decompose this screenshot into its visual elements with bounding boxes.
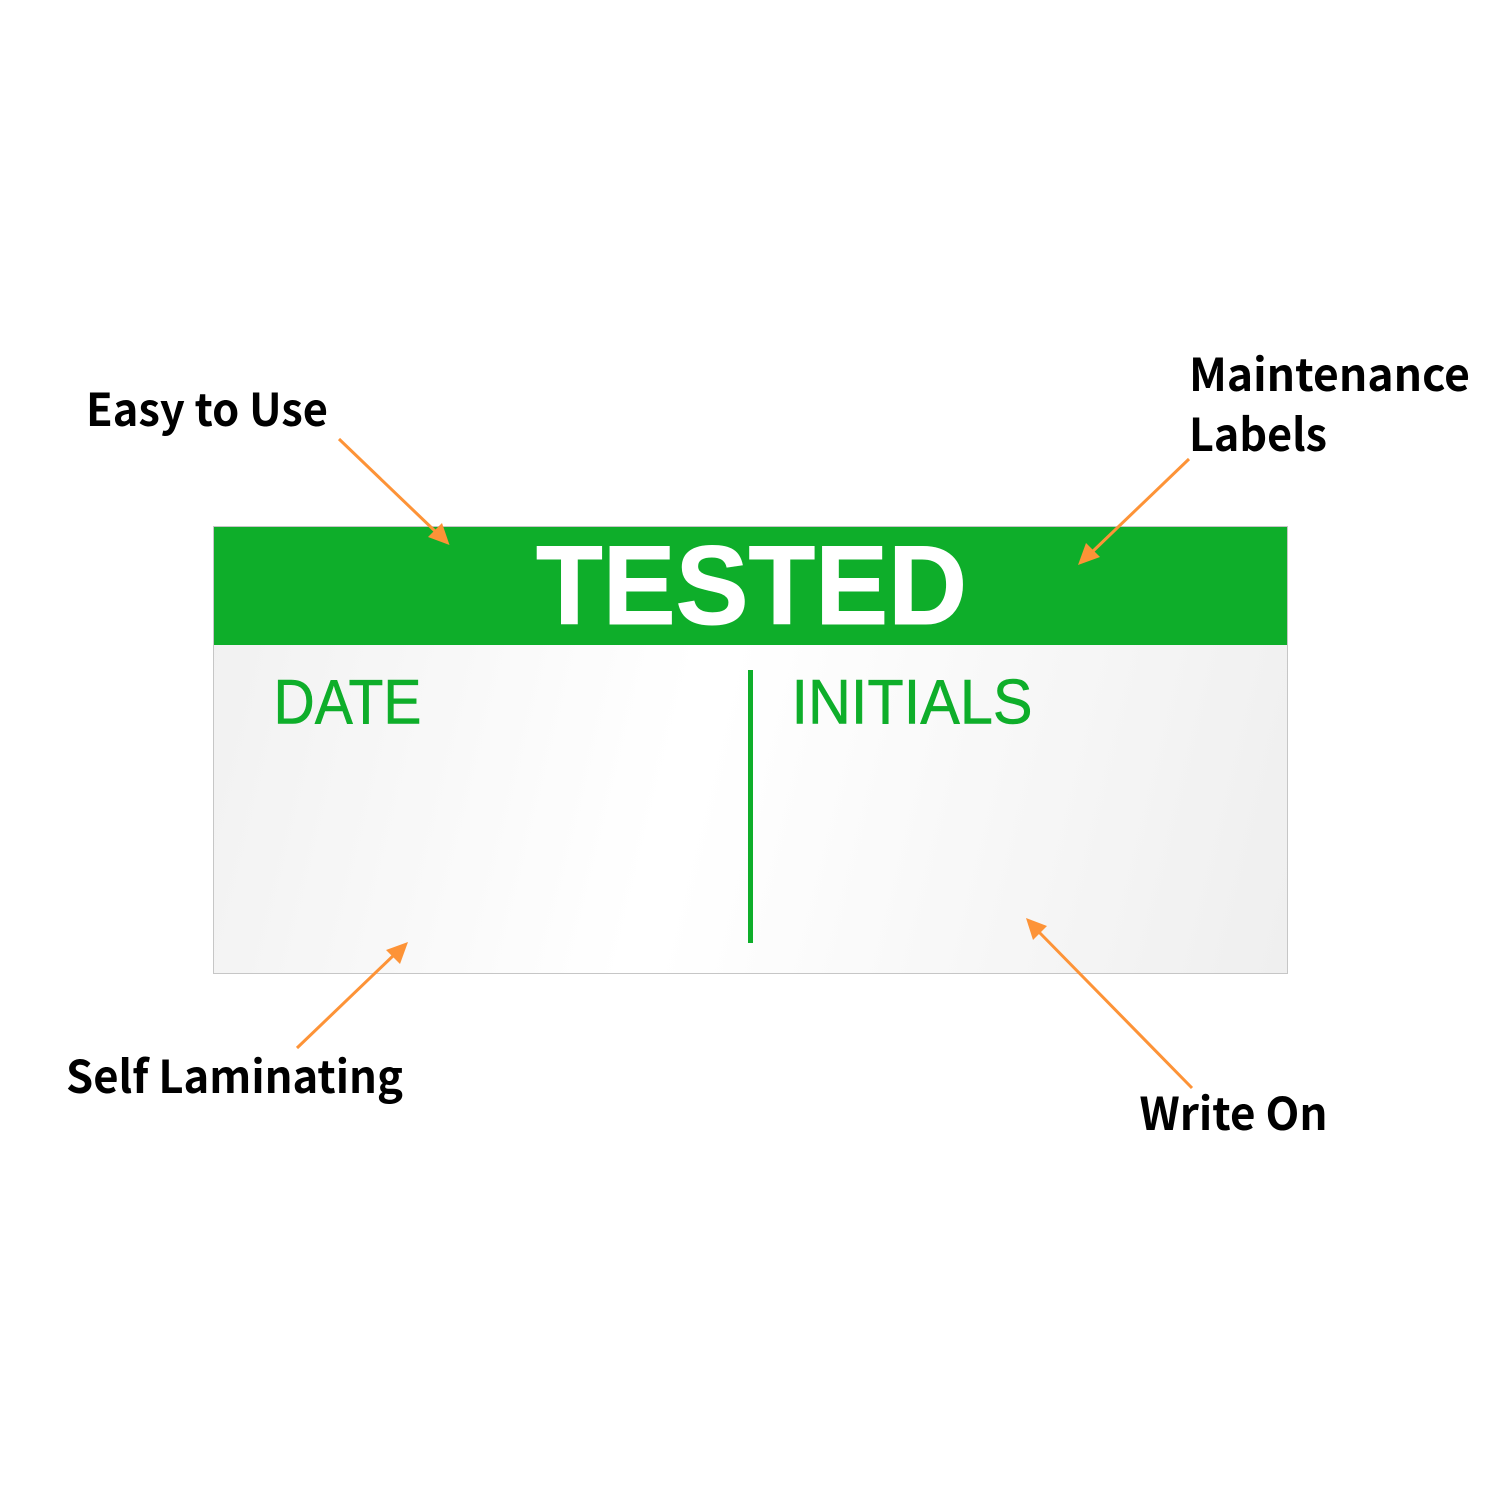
- field: date: DATE: [274, 668, 422, 738]
- arrow: self laminating: [297, 942, 408, 1048]
- callout: easy to use: Easy to Use: [86, 374, 328, 439]
- arrow: maintenance labels: [1078, 459, 1189, 565]
- callout: write on: Write On: [1140, 1078, 1328, 1143]
- callout: maintenance labels: Maintenance: [1189, 339, 1470, 404]
- heading: tested: TESTED: [536, 523, 967, 648]
- callout: self laminating: Self Laminating: [66, 1041, 403, 1106]
- label outline: [214, 526, 1288, 974]
- callout: maintenance labels: Labels: [1189, 399, 1327, 464]
- label panel: [214, 523, 1288, 974]
- callout: maintenance labels: [1189, 339, 1470, 464]
- green header band: [214, 527, 1287, 645]
- field divider: [748, 670, 753, 943]
- arrow: easy to use: [339, 439, 450, 545]
- field: initials: INITIALS: [792, 668, 1032, 738]
- label body: [214, 645, 1287, 973]
- arrow: write on: [1026, 918, 1192, 1088]
